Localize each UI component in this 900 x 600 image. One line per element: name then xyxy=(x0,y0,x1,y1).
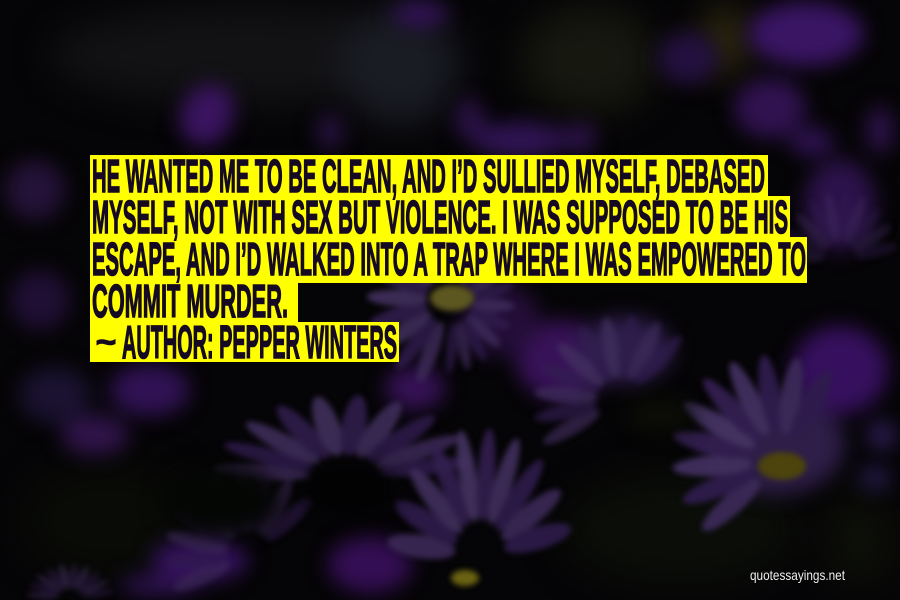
flower: lower centre fan xyxy=(387,427,573,563)
flower: right of centre xyxy=(499,281,695,455)
quote highlight strips xyxy=(90,155,807,362)
flower: upper centre with yellow eye xyxy=(346,193,478,387)
text: AUTHOR: PEPPER WINTERS xyxy=(122,316,397,368)
quote text: COMMIT MURDER. xyxy=(92,275,288,327)
author line: ~ xyxy=(96,326,116,359)
flower: upper right petals xyxy=(781,191,899,264)
flower: lower left small xyxy=(133,437,325,600)
blurred petal fans xyxy=(26,191,899,600)
quote text xyxy=(92,150,806,327)
author line xyxy=(96,316,397,368)
watermark: quotessayings.net xyxy=(750,567,845,583)
dark flower centres xyxy=(160,397,694,536)
yellow flower eyes xyxy=(430,285,806,586)
flower: bottom left xyxy=(26,564,114,600)
flower: lower left fan xyxy=(212,394,477,483)
flower: lower right main xyxy=(627,310,854,544)
